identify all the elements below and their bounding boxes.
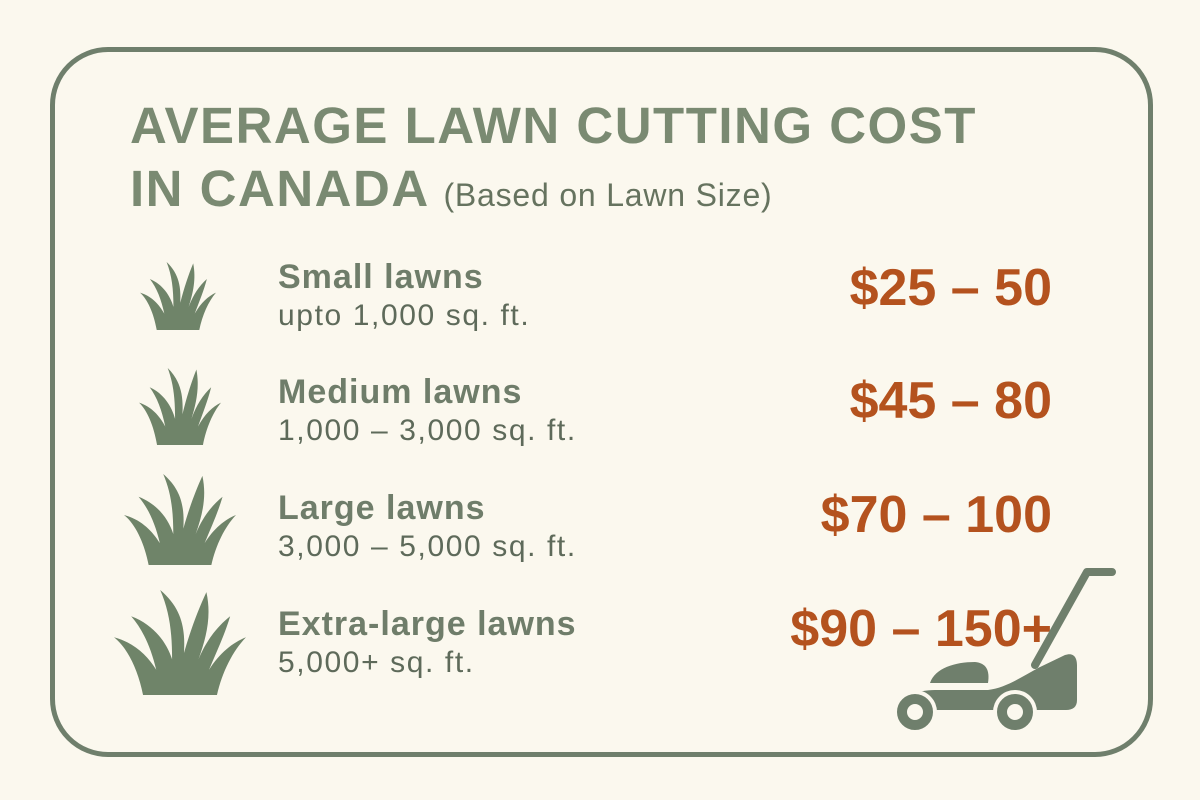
title [130,97,977,217]
price: medium: $45 – 80 [850,372,1052,430]
row: large: 3,000 – 5,000 sq. ft. [278,530,577,563]
row: medium: 1,000 – 3,000 sq. ft. [278,414,577,447]
row: small: Small lawns [278,258,484,296]
row: extra-large: Extra-large lawns [278,605,577,643]
price: small: $25 – 50 [850,259,1052,317]
row: small: upto 1,000 sq. ft. [278,299,530,332]
row: medium [278,373,577,447]
icon: large grass [124,474,236,565]
row: extra-large [278,605,577,679]
row: large: Large lawns [278,489,486,527]
price: extra-large: $90 – 150+ [790,600,1052,658]
price: large: $70 – 100 [821,486,1052,544]
row: medium: Medium lawns [278,373,522,411]
icon: lawn mower [897,568,1116,730]
row: small [278,258,530,332]
title: AVERAGE LAWN CUTTING COST [130,97,977,154]
row: large [278,489,577,563]
icon: medium grass [139,368,221,445]
row: extra-large: 5,000+ sq. ft. [278,646,475,679]
icon: small grass [140,262,216,330]
icon: extra-large grass [114,590,246,695]
title: IN CANADA (Based on Lawn Size) [130,160,772,217]
